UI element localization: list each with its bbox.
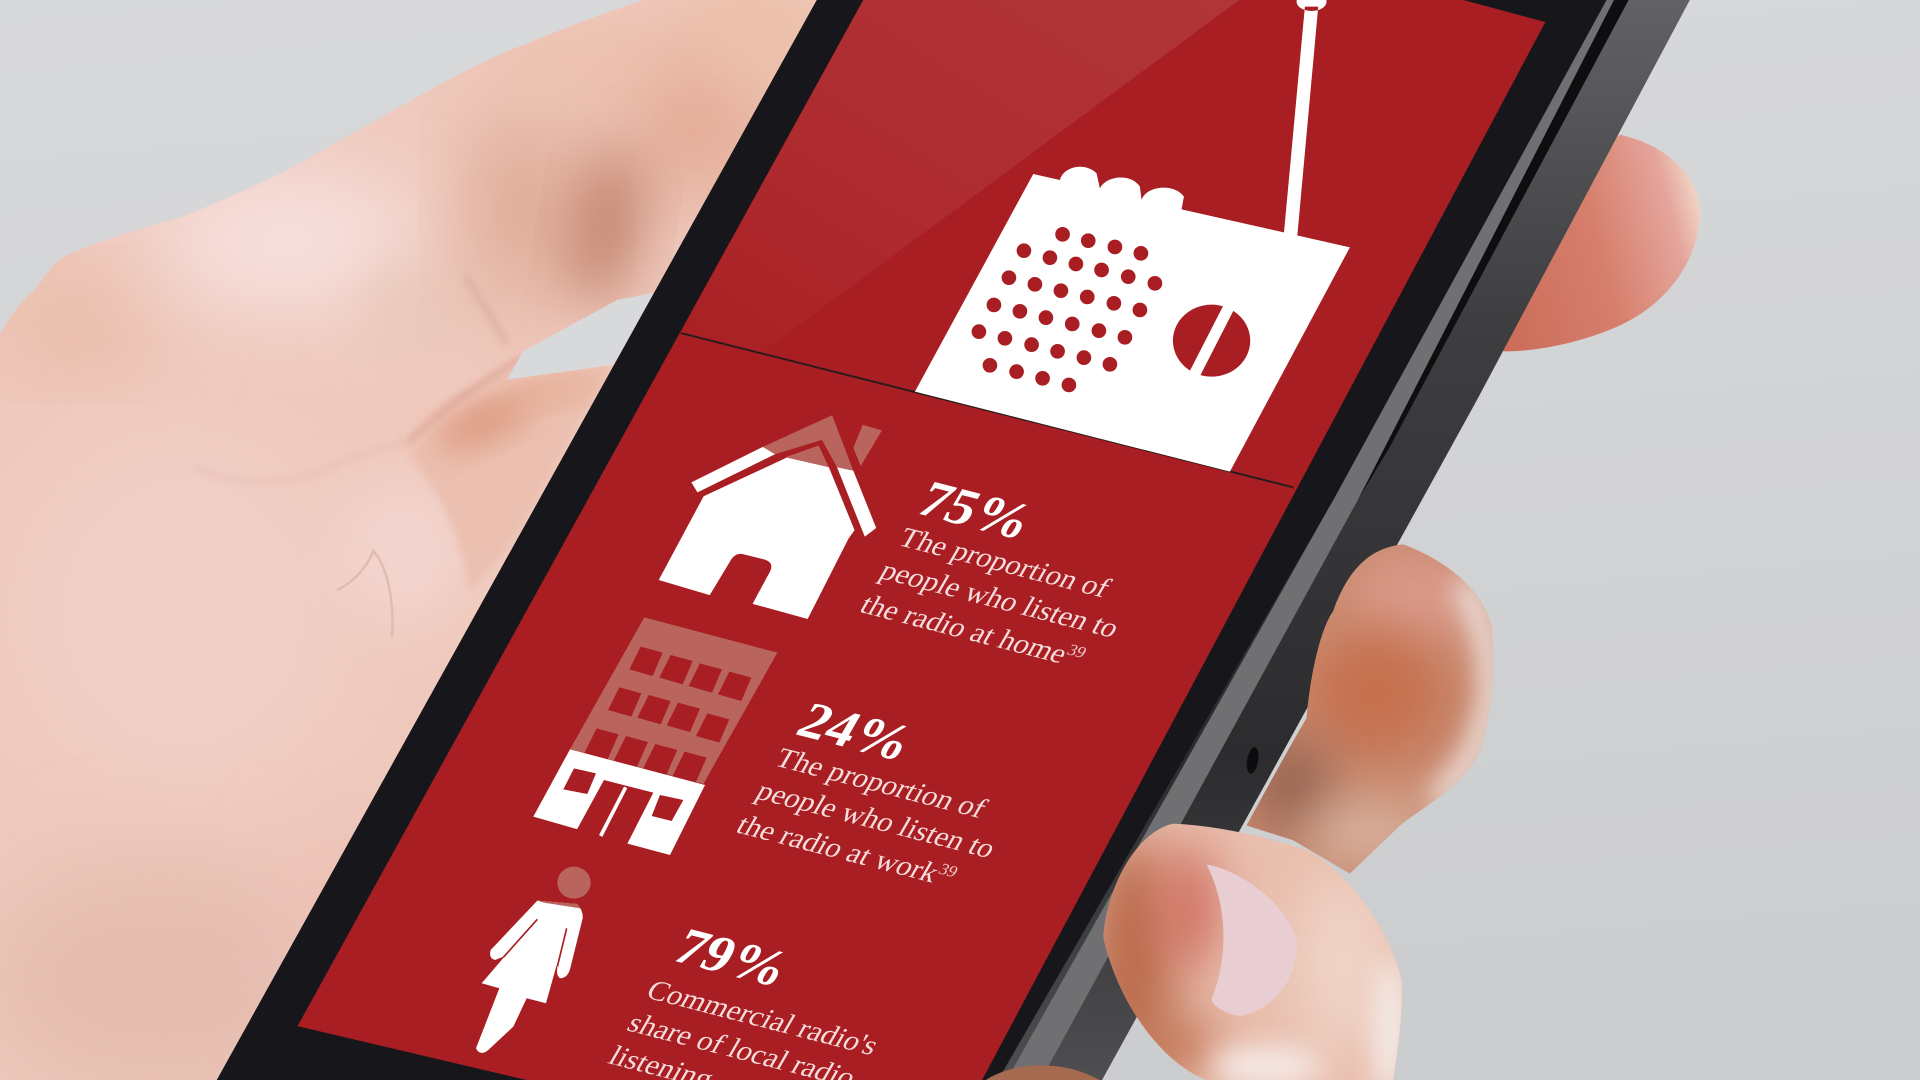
stat: 75 percent at home: the radio at home bbox=[854, 589, 1073, 669]
stat: 79 percent commercial radio bbox=[603, 916, 918, 1080]
icon: radio bbox=[915, 0, 1350, 472]
value: 24% bbox=[788, 691, 925, 772]
phone: metal edge strip bbox=[1007, 0, 1614, 1080]
stat: 75 percent at home bbox=[853, 470, 1174, 678]
phone: black bezel bbox=[217, 0, 1607, 1080]
stat: 75 percent at home: 39 bbox=[1064, 641, 1090, 662]
icon: office building bbox=[533, 617, 777, 855]
radio antenna bbox=[1284, 0, 1327, 237]
house roof white right bbox=[837, 467, 876, 537]
person arm gaps bbox=[503, 919, 567, 967]
stat: 24 percent at work bbox=[731, 691, 1050, 898]
phone: red screen bbox=[298, 0, 1545, 1080]
stat: 24 percent at work: 39 bbox=[935, 860, 961, 881]
value: 75% bbox=[908, 470, 1045, 550]
screen gloss bbox=[681, 0, 1239, 353]
icon: house bbox=[659, 415, 882, 619]
hand: palm and fingers bbox=[0, 0, 816, 1080]
building lower windows bbox=[563, 768, 683, 821]
hand: fingers over phone bbox=[1090, 537, 1507, 1080]
phone microphone hole bbox=[1245, 746, 1260, 775]
hand: index finger behind phone bbox=[1469, 135, 1700, 351]
stat: 24 percent at work: the radio at work bbox=[731, 809, 945, 889]
phone: side casing bbox=[931, 0, 1690, 1080]
background gap between fingers bbox=[507, 293, 654, 380]
screen divider line bbox=[681, 333, 1293, 487]
description: The proportion of bbox=[893, 522, 1116, 604]
thumb bbox=[1090, 818, 1407, 1080]
phone bbox=[217, 0, 1690, 1080]
phone: black band beside the edge bbox=[1358, 0, 1629, 500]
person body bbox=[476, 901, 583, 1053]
building door bbox=[577, 780, 653, 845]
house roof faded bbox=[763, 415, 853, 471]
stat: 75 percent at home: people who listen to bbox=[874, 555, 1125, 644]
radio dial bbox=[1173, 300, 1250, 380]
building ground floor bbox=[533, 749, 705, 855]
description: Commercial radio's bbox=[641, 974, 884, 1061]
lower finger lobe bbox=[408, 365, 612, 593]
house body bbox=[659, 456, 855, 619]
stat: 24 percent at work: people who listen to bbox=[750, 775, 1002, 864]
house faded apex bbox=[785, 446, 829, 467]
building windows bbox=[582, 647, 751, 788]
hand: bottom fingertip bbox=[986, 1065, 1100, 1080]
radio body bbox=[915, 167, 1350, 472]
person head bbox=[557, 867, 591, 899]
house roof white left bbox=[691, 447, 775, 492]
icon: person bbox=[476, 867, 591, 1053]
building upper floors bbox=[570, 617, 777, 784]
person shoulder shade bbox=[537, 901, 581, 908]
house chimney bbox=[853, 425, 882, 466]
value: 79% bbox=[664, 917, 801, 998]
radio speaker dots bbox=[972, 227, 1162, 392]
middle finger bbox=[1246, 544, 1493, 874]
description: The proportion of bbox=[769, 742, 992, 824]
thumb nail bbox=[1207, 864, 1297, 1016]
